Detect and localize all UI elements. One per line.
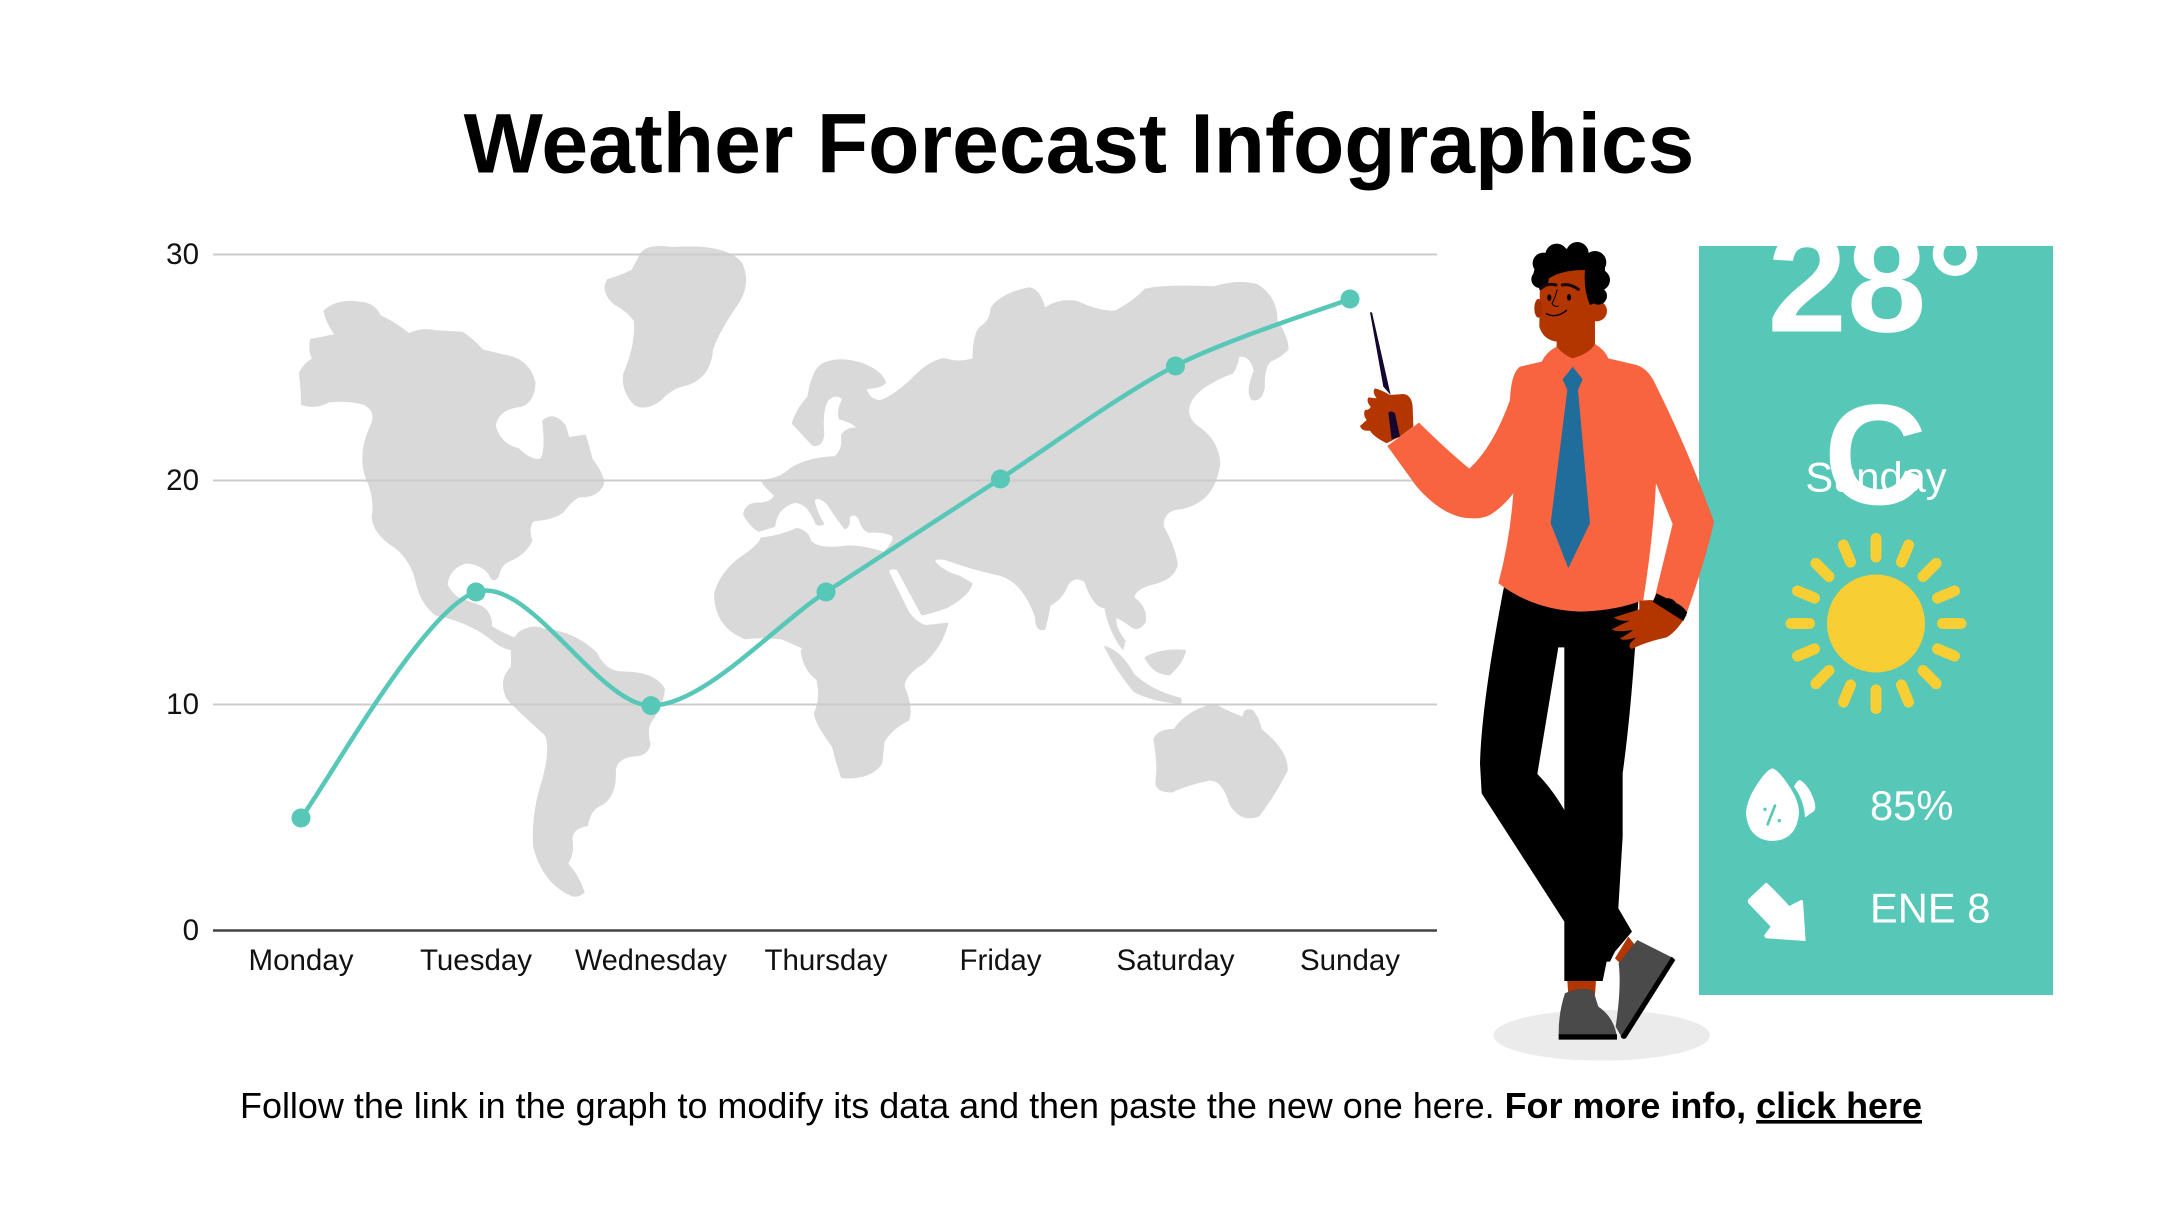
y axis labels: 0 xyxy=(183,914,199,947)
temperature xyxy=(1772,246,1978,506)
tie xyxy=(1551,367,1590,568)
y axis labels xyxy=(166,238,199,947)
day label: Sunday xyxy=(1805,454,1947,500)
data points xyxy=(292,290,1360,828)
x axis labels: Tuesday xyxy=(420,944,532,977)
presenter figure xyxy=(1360,242,1714,1040)
y axis labels: 30 xyxy=(166,238,199,271)
shirt xyxy=(1387,344,1714,613)
x axis labels: Monday xyxy=(249,944,354,977)
y axis labels: 20 xyxy=(166,464,199,497)
x axis labels: Wednesday xyxy=(575,944,727,977)
icon: sun xyxy=(1791,538,1961,708)
x axis labels: Thursday xyxy=(765,944,888,977)
temperature: 28° xyxy=(1767,204,1984,362)
humidity value: 85% xyxy=(1870,782,1953,829)
ground shadow xyxy=(1493,1010,1710,1061)
title: Weather Forecast Infographics xyxy=(464,96,1694,190)
y axis labels: 10 xyxy=(166,688,199,721)
world map xyxy=(300,247,1288,896)
line chart xyxy=(166,238,1437,977)
panel: weather card xyxy=(1699,204,2053,995)
footer note: Follow the link in the graph to modify its data and then paste the new one here. For more info, click here xyxy=(240,1085,1922,1126)
icon: wind arrow xyxy=(1748,883,1806,941)
x axis labels: Saturday xyxy=(1116,944,1235,977)
temperature line xyxy=(301,299,1350,818)
x axis labels: Friday xyxy=(960,944,1042,977)
temperature: C xyxy=(1824,376,1927,535)
pointer stick xyxy=(1370,312,1391,395)
face details xyxy=(1541,284,1556,289)
head xyxy=(1539,265,1595,358)
pointing hand xyxy=(1360,388,1413,443)
wind value: ENE 8 xyxy=(1870,884,1990,932)
x axis labels xyxy=(249,944,1400,977)
hair xyxy=(1531,242,1610,305)
icon: humidity drop xyxy=(1746,768,1815,841)
resting hand and watch xyxy=(1612,593,1687,649)
legs and shoes xyxy=(1480,577,1675,1040)
x axis labels: Sunday xyxy=(1300,944,1400,977)
torso and head xyxy=(1360,242,1714,613)
